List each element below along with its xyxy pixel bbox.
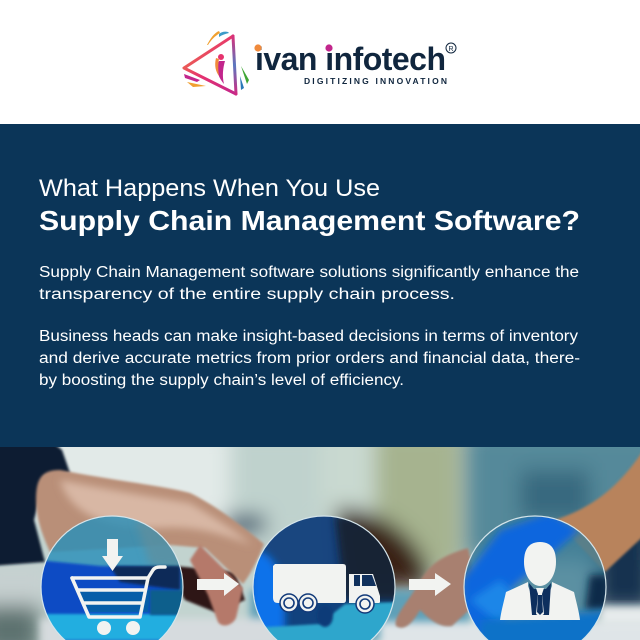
person circle tint [462, 512, 610, 640]
icon circle: cart [36, 516, 190, 640]
cart circle tint [36, 516, 190, 640]
icon: person in suit [500, 542, 580, 620]
cart circle ring [41, 516, 183, 640]
icon: delivery truck [273, 564, 380, 613]
sleeve [0, 440, 70, 566]
panel: navy text block [0, 124, 640, 447]
icon: download arrow [102, 539, 123, 571]
tagline: DIGITIZING INNOVATION [304, 76, 447, 86]
left hand [36, 470, 264, 584]
logo: ivan infotech [184, 31, 456, 94]
right hand [396, 548, 480, 628]
blurred office background [0, 430, 640, 640]
paragraph 1: transparency of the entire supply chain process. [39, 286, 455, 303]
registered mark [446, 43, 456, 53]
left hand finger [190, 545, 243, 625]
truck circle ring [253, 516, 395, 640]
icon circle: truck [250, 516, 400, 640]
paragraph 1: Supply Chain Management software solutions significantly enhance the [39, 264, 579, 281]
icon circle: business person [462, 512, 610, 640]
dark shadow under the hand [180, 564, 246, 614]
paragraph 2: and derive accurate metrics from prior orders and financial data, there- [39, 350, 580, 367]
paragraph 2 [39, 328, 580, 389]
paragraph 2: Business heads can make insight-based decisions in terms of inventory [39, 328, 578, 345]
paragraph 1 [39, 264, 579, 303]
truck circle tint [250, 516, 400, 640]
cart wheels [97, 621, 140, 635]
photo: hands on a keyboard [0, 430, 640, 640]
logo wordmark: ivan infotech [255, 41, 446, 77]
desk and keyboard [250, 590, 470, 640]
right arm [555, 440, 640, 572]
registered mark: R [448, 46, 454, 53]
heading line 1: What Happens When You Use [39, 175, 380, 202]
logo dots on the letter i [254, 44, 333, 52]
header: white logo band [0, 0, 640, 124]
arrow: cart to truck [197, 573, 239, 596]
heading line 2: Supply Chain Management Software? [39, 205, 580, 236]
person circle ring [464, 516, 606, 640]
arrow: truck to person [409, 573, 451, 596]
icon: shopping cart [72, 567, 165, 617]
icon: triangle play mark [184, 31, 249, 94]
paragraph 2: by boosting the supply chain’s level of efficiency. [39, 372, 404, 389]
